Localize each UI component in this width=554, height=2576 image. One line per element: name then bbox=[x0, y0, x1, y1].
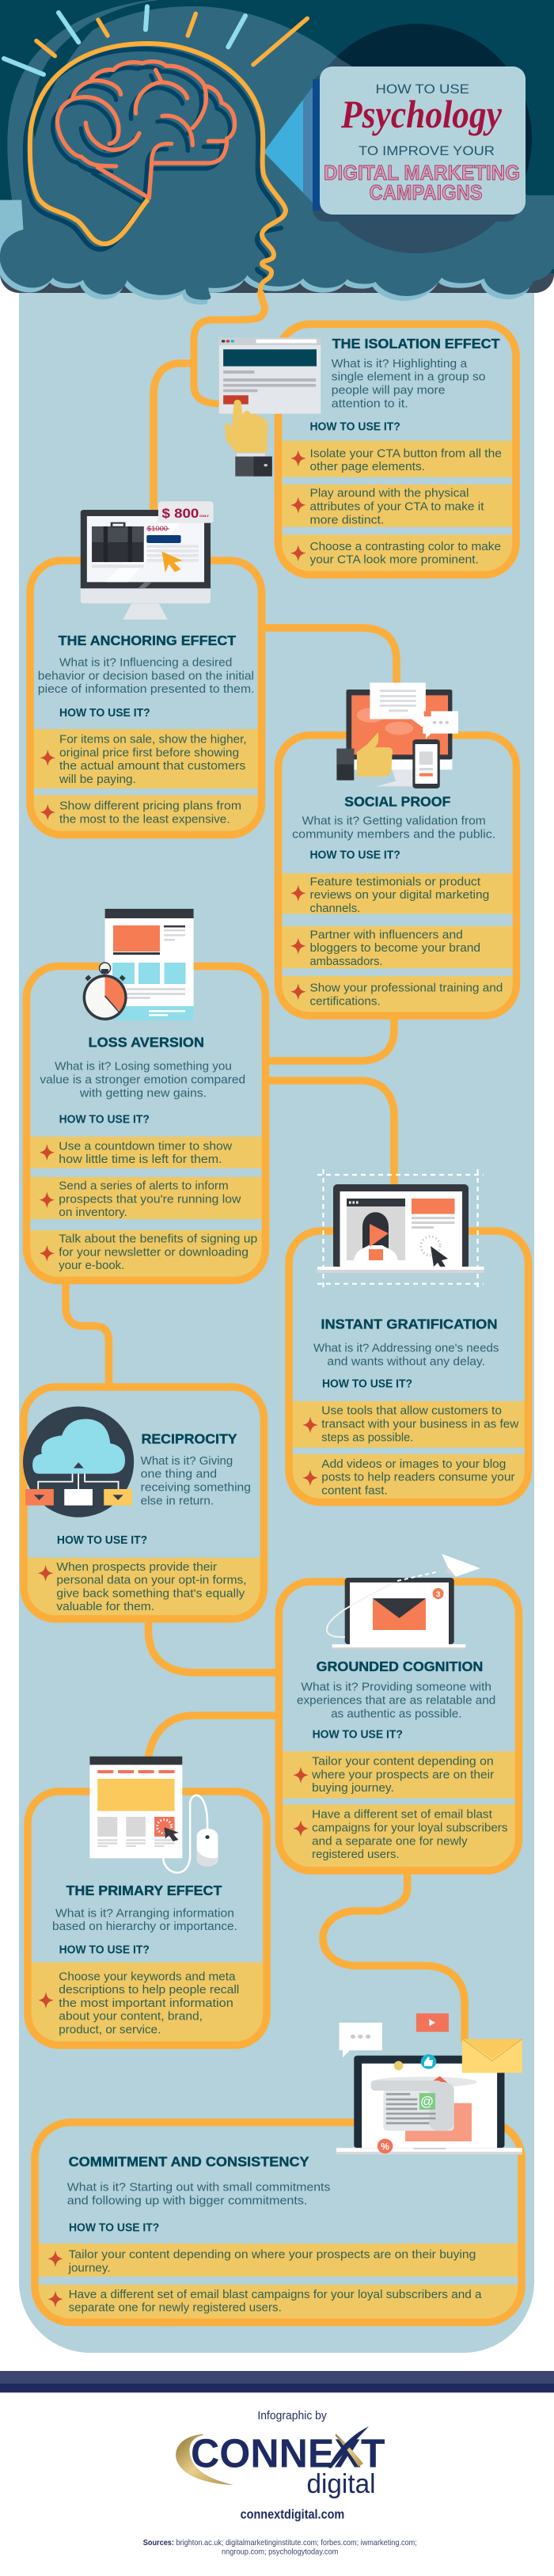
tips: where your prospects are on their bbox=[311, 1769, 494, 1781]
text: sources bbox=[143, 2538, 417, 2557]
tips: Tailor your content depending on bbox=[312, 1755, 494, 1768]
tips bbox=[290, 447, 502, 567]
logo: connext digital: digital bbox=[307, 2469, 375, 2499]
icon: monitor with price tag: ONLY bbox=[199, 514, 209, 518]
logo: connext digital bbox=[176, 2426, 385, 2499]
heading: grounded cognition: GROUNDED COGNITION bbox=[317, 1658, 483, 1674]
old price: $1000 bbox=[147, 526, 169, 533]
text: definition: people will pay more bbox=[332, 384, 446, 397]
tips: Tailor your content depending on where your prospects are on their buying bbox=[69, 2249, 476, 2262]
tips: the most to the least expensive. bbox=[59, 813, 230, 826]
panel: the anchoring effect bbox=[27, 560, 264, 838]
tips bbox=[302, 1405, 519, 1498]
head outline and first connector bbox=[30, 44, 286, 404]
background panel bbox=[19, 277, 534, 2353]
tips: the most important information bbox=[59, 1997, 233, 2010]
subheading: HOW TO USE IT? bbox=[59, 1944, 150, 1957]
tips: Have a different set of email blast campaigns for your loyal subscribers and a bbox=[69, 2289, 482, 2301]
subheading: HOW TO USE IT? bbox=[322, 1378, 412, 1391]
footer stripes bbox=[0, 2371, 554, 2392]
tips bbox=[39, 1140, 257, 1272]
panel: reciprocity bbox=[20, 1387, 268, 1625]
tips: Talk about the benefits of signing up bbox=[59, 1233, 257, 1245]
text: definition bbox=[313, 1343, 499, 1368]
clouds bbox=[0, 196, 554, 305]
tips bbox=[290, 876, 503, 1008]
subheading: HOW TO USE IT? bbox=[313, 1729, 403, 1742]
tips: bloggers to become your brand bbox=[310, 942, 480, 955]
text: definition: What is it? Starting out with small commitments bbox=[67, 2182, 330, 2194]
text: definition: What is it? Getting validation from bbox=[302, 815, 486, 828]
heading: social proof: SOCIAL PROOF bbox=[344, 793, 451, 809]
tips: journey. bbox=[68, 2262, 111, 2274]
tips: Show your professional training and bbox=[310, 982, 503, 995]
text: definition: receiving something bbox=[141, 1481, 251, 1494]
subheading: HOW TO USE IT? bbox=[59, 707, 150, 720]
panel: commitment and consistency bbox=[31, 2122, 526, 2324]
header background bbox=[0, 0, 554, 293]
subheading: HOW TO USE IT? bbox=[59, 1113, 150, 1126]
at sign: @ bbox=[420, 2094, 434, 2109]
text: sources: nngroup.com; psychologytoday.com bbox=[222, 2548, 339, 2557]
tips bbox=[38, 1561, 247, 1613]
percent badge: % bbox=[381, 2141, 389, 2152]
tips: channels. bbox=[310, 902, 360, 915]
text: definition: What is it? Arranging information bbox=[55, 1907, 234, 1920]
text: definition: What is it? Influencing a desired bbox=[59, 657, 232, 670]
tips: registered users. bbox=[312, 1848, 399, 1861]
logo: connext digital: CONNEXT bbox=[191, 2431, 385, 2476]
heading: the isolation effect: THE ISOLATION EFFECT bbox=[332, 336, 500, 351]
tips bbox=[40, 733, 247, 826]
tips: buying journey. bbox=[312, 1782, 394, 1795]
tips: prospects that you're running low bbox=[59, 1193, 241, 1206]
text: definition: else in return. bbox=[141, 1495, 214, 1507]
tips: give back something that's equally bbox=[56, 1587, 245, 1600]
icon: browser and hand bbox=[219, 338, 321, 477]
tips: about your content, brand, bbox=[59, 2011, 203, 2023]
text: definition bbox=[40, 1061, 245, 1100]
icon: head and brain bbox=[25, 49, 281, 279]
tips: posts to help readers consume your bbox=[321, 1472, 515, 1484]
text: sources: Sources: brighton.ac.uk; digitalmarketinginstitute.com; forbes.com; iwmarketing.com; bbox=[143, 2538, 417, 2548]
tips: Partner with influencers and bbox=[310, 929, 463, 941]
icon: cloud network bbox=[23, 1407, 134, 1518]
tips bbox=[38, 1970, 239, 2037]
icon: laptop with email and paper plane bbox=[327, 1554, 480, 1650]
price tag text: $ 800 bbox=[161, 506, 199, 521]
text: definition: community members and the public. bbox=[292, 828, 495, 841]
text: definition: piece of information presented to them. bbox=[38, 683, 255, 696]
title callout backdrop bbox=[264, 57, 518, 253]
text: definition bbox=[38, 657, 255, 696]
tips: original price first before showing bbox=[59, 747, 239, 759]
tips: Have a different set of email blast bbox=[312, 1809, 492, 1822]
tips: Use tools that allow customers to bbox=[321, 1405, 502, 1418]
tips bbox=[293, 1755, 508, 1861]
header bbox=[0, 0, 554, 305]
connector lines bbox=[66, 363, 465, 2042]
tips: descriptions to help people recall bbox=[59, 1984, 239, 1997]
text: definition bbox=[297, 1681, 495, 1720]
icon: monitor, thumb and phone bbox=[336, 682, 458, 788]
title card: TO IMPROVE YOUR bbox=[359, 143, 495, 158]
heading: reciprocity: RECIPROCITY bbox=[142, 1430, 237, 1446]
tips: for your newsletter or downloading bbox=[59, 1246, 249, 1259]
text: definition: with getting new gains. bbox=[79, 1087, 207, 1100]
subheading: HOW TO USE IT? bbox=[310, 849, 400, 861]
tips: on inventory. bbox=[59, 1206, 127, 1219]
tips: Isolate your CTA button from all the bbox=[310, 447, 502, 460]
tips: your CTA look more prominent. bbox=[310, 554, 479, 567]
tips: other page elements. bbox=[310, 461, 425, 473]
text: definition bbox=[332, 358, 485, 410]
panel: instant gratification bbox=[285, 1231, 532, 1506]
tips: content fast. bbox=[321, 1485, 388, 1498]
tips: When prospects provide their bbox=[56, 1561, 217, 1574]
thumbs up glyph bbox=[424, 2057, 433, 2066]
text: definition bbox=[292, 815, 495, 841]
heading: commitment and consistency: COMMITMENT AND CONSISTENCY bbox=[69, 2154, 309, 2170]
tips: steps as possible. bbox=[321, 1431, 413, 1444]
icon: web page and stopwatch bbox=[83, 909, 194, 1020]
tips: personal data on your opt-in forms, bbox=[56, 1575, 247, 1587]
title card: Psychology bbox=[340, 92, 503, 136]
tips: For items on sale, show the higher, bbox=[59, 733, 247, 746]
tips bbox=[47, 2249, 482, 2315]
subheading: HOW TO USE IT? bbox=[69, 2221, 159, 2234]
text: website: connextdigital.com bbox=[241, 2507, 344, 2522]
tips: Choose your keywords and meta bbox=[59, 1970, 236, 1983]
tips: Use a countdown timer to show bbox=[59, 1140, 233, 1153]
tips: Play around with the physical bbox=[310, 488, 469, 500]
text: definition: What is it? Providing someone with bbox=[301, 1681, 491, 1694]
subheading: HOW TO USE IT? bbox=[57, 1534, 147, 1547]
tips: more distinct. bbox=[310, 514, 384, 526]
panel: social proof bbox=[275, 735, 520, 1020]
text: definition: What is it? Losing something you bbox=[55, 1061, 232, 1073]
panel: the isolation effect bbox=[275, 325, 520, 578]
panel: the primary effect bbox=[24, 1791, 271, 2050]
tips: Send a series of alerts to inform bbox=[59, 1180, 229, 1192]
heading: loss aversion: LOSS AVERSION bbox=[89, 1035, 204, 1051]
text: definition: as authentic as possible. bbox=[331, 1708, 462, 1720]
text: definition: and following up with bigger commitments. bbox=[67, 2195, 307, 2208]
tips: Choose a contrasting color to make bbox=[310, 541, 501, 553]
rays bbox=[4, 6, 307, 74]
tips: Show different pricing plans from bbox=[59, 800, 241, 813]
icon: web page and mouse bbox=[89, 1757, 218, 1873]
text: definition: experiences that are as relatable and bbox=[297, 1694, 495, 1707]
tips: Add videos or images to your blog bbox=[321, 1458, 506, 1471]
tips: certifications. bbox=[310, 995, 381, 1008]
tips: transact with your business in as few bbox=[321, 1419, 519, 1431]
tips: campaigns for your loyal subscribers bbox=[312, 1822, 508, 1834]
text: definition: value is a stronger emotion compared bbox=[40, 1073, 245, 1086]
text: definition bbox=[67, 2182, 330, 2208]
text: definition: attention to it. bbox=[332, 397, 408, 410]
text: definition: single element in a group so bbox=[332, 371, 485, 384]
tips: Feature testimonials or product bbox=[310, 876, 480, 888]
tips: separate one for newly registered users. bbox=[69, 2302, 282, 2315]
text: definition: based on hierarchy or importance. bbox=[52, 1921, 237, 1933]
tips: your e-book. bbox=[59, 1260, 124, 1272]
text: definition: one thing and bbox=[141, 1468, 217, 1481]
text: definition bbox=[141, 1455, 251, 1507]
tips: how little time is left for them. bbox=[59, 1153, 222, 1166]
icon: laptop with email and paper plane: 3 bbox=[436, 1590, 441, 1599]
tips: ambassadors. bbox=[310, 956, 383, 968]
panel: grounded cognition bbox=[275, 1582, 522, 1875]
text: infographic by: Infographic by bbox=[257, 2409, 327, 2422]
tips: will be paying. bbox=[59, 773, 136, 786]
text: definition bbox=[52, 1907, 237, 1933]
icon: tablet with video bbox=[317, 1169, 484, 1289]
subheading: HOW TO USE IT? bbox=[310, 420, 400, 433]
title card: CAMPAIGNS bbox=[369, 180, 483, 204]
heading: the anchoring effect: THE ANCHORING EFFECT bbox=[59, 633, 237, 648]
tips: attributes of your CTA to make it bbox=[310, 500, 484, 513]
title card: DIGITAL MARKETING bbox=[324, 161, 520, 184]
text: definition: What is it? Giving bbox=[141, 1455, 233, 1468]
panel: loss aversion bbox=[23, 966, 269, 1282]
title card bbox=[320, 66, 526, 215]
tips: the actual amount that customers bbox=[59, 760, 245, 773]
title card: HOW TO USE bbox=[375, 82, 469, 97]
text: definition: and wants without any delay. bbox=[327, 1355, 485, 1368]
heading: the primary effect: THE PRIMARY EFFECT bbox=[66, 1883, 222, 1898]
text: definition: What is it? Highlighting a bbox=[332, 358, 468, 370]
heading: instant gratification: INSTANT GRATIFICATION bbox=[321, 1316, 498, 1332]
tips: product, or service. bbox=[59, 2024, 161, 2037]
icon: laptop with newsletter bbox=[336, 2013, 522, 2155]
tips: and a separate one for newly bbox=[312, 1835, 468, 1848]
text: definition: behavior or decision based on the initial bbox=[38, 670, 254, 682]
icon: monitor with price tag bbox=[81, 501, 214, 620]
tips: valuable for them. bbox=[56, 1601, 154, 1613]
tips: reviews on your digital marketing bbox=[310, 889, 489, 902]
text: definition: What is it? Addressing one's needs bbox=[313, 1343, 499, 1355]
